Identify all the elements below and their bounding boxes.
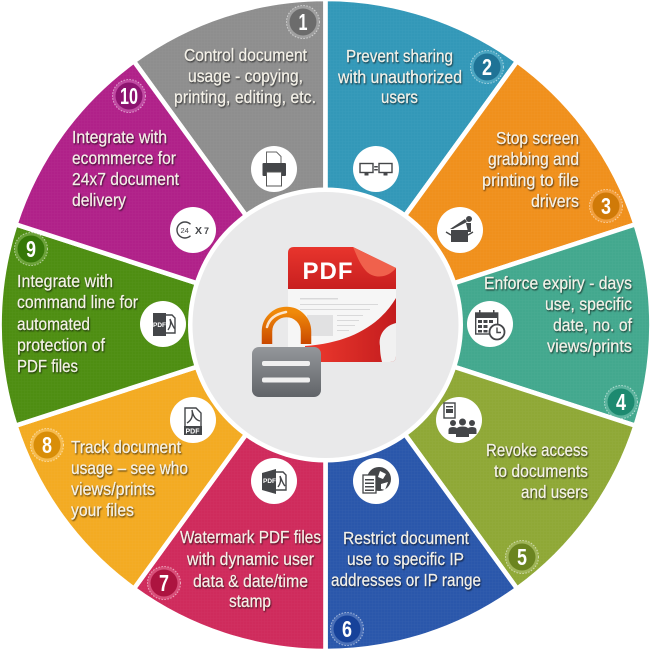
- text: panel 2: [337, 46, 462, 107]
- badge: number 7: [148, 566, 180, 600]
- panel: 8 track document usage: [16, 325, 326, 589]
- text: panel 9: automated: [17, 314, 90, 334]
- badge: number 9: 9: [26, 236, 36, 262]
- text: panel 5: and users: [521, 482, 588, 502]
- text: panel 3: grabbing and: [488, 149, 579, 169]
- icon: PDF watermark: [251, 458, 297, 504]
- text: panel 5: to documents: [494, 461, 588, 481]
- text: panel 7: with dynamic user: [186, 549, 314, 569]
- badge: number 6: 6: [342, 616, 352, 642]
- text: panel 9: protection of: [17, 335, 105, 355]
- text: panel 4: date, no. of: [553, 315, 632, 335]
- badge: number 4: 4: [616, 389, 626, 415]
- text: panel 7: Watermark PDF files: [180, 527, 321, 547]
- badge: number 3: 3: [601, 193, 611, 219]
- icon: 24 x 7: X: [195, 225, 202, 237]
- text: panel 10: ecommerce for: [72, 148, 176, 168]
- text: panel 1: printing, editing, etc.: [174, 87, 316, 107]
- text: panel 4: [484, 273, 632, 356]
- text: panel 10: Integrate with: [72, 127, 167, 147]
- badge: number 8: [30, 428, 64, 462]
- badge: number 2: [470, 50, 504, 84]
- badge: number 3: [590, 190, 622, 222]
- text: panel 5: [486, 440, 588, 502]
- text: panel 4: Enforce expiry - days: [484, 273, 632, 293]
- badge: number 10: [112, 80, 146, 112]
- text: panel 1: [174, 45, 316, 107]
- text: panel 8: views/prints: [71, 479, 155, 499]
- panel: 1 control document usage: [134, 0, 326, 325]
- panel: 7 watermark PDF files: [134, 325, 326, 651]
- text: panel 7: [180, 527, 321, 611]
- icon: two connected monitors: [353, 146, 399, 192]
- text: panel 8: your files: [71, 500, 134, 520]
- icon: PDF document: [170, 397, 216, 443]
- text: panel 9: Integrate with: [17, 271, 113, 291]
- icon: globe and document: [353, 458, 399, 504]
- icon: PDF document: PDF: [186, 428, 200, 436]
- icon: calendar and clock: [467, 301, 513, 347]
- badge: number 1: 1: [298, 9, 308, 35]
- text: panel 6: addresses or IP range: [331, 570, 481, 590]
- icon: screen grab box: [437, 207, 483, 253]
- text: panel 7: data & date/time: [193, 571, 308, 591]
- text: panel 3: printing to file: [482, 170, 579, 190]
- icon: 24 x 7: [170, 207, 216, 253]
- text: panel 2: Prevent sharing: [346, 46, 453, 66]
- icon: PDF conversion: [140, 301, 186, 347]
- center hub: [188, 188, 463, 462]
- icon: 24 x 7: 7: [204, 226, 209, 236]
- badge: number 7: 7: [159, 570, 169, 596]
- text: panel 8: [71, 437, 188, 520]
- panel: 4 enforce expiry: [326, 224, 650, 426]
- text: panel 7: stamp: [229, 591, 271, 611]
- icon: padlock: [252, 312, 321, 397]
- icon: 24 x 7: 24: [180, 226, 189, 235]
- text: panel 1: usage - copying,: [188, 66, 303, 86]
- badge: number 10: 10: [120, 83, 138, 109]
- icon: PDF document: [288, 247, 396, 362]
- text: panel 10: [72, 127, 179, 210]
- text: panel 4: use, specific: [545, 294, 632, 314]
- text: panel 3: drivers: [531, 191, 579, 211]
- badge: number 6: [330, 612, 364, 646]
- text: panel 3: [482, 128, 579, 211]
- text: panel 2: with unauthorized: [337, 67, 462, 87]
- text: panel 8: usage – see who: [71, 458, 188, 478]
- label: PDF: PDF: [302, 258, 354, 285]
- text: panel 9: command line for: [17, 292, 138, 312]
- text: panel 9: [17, 271, 138, 376]
- badge: number 4: [604, 386, 638, 418]
- text: panel 1: Control document: [184, 45, 307, 65]
- panel: 3 stop screen grabbing: [326, 61, 636, 325]
- panel: 5 revoke access: [326, 325, 636, 589]
- text: panel 6: use to specific IP: [347, 549, 464, 569]
- badge: number 8: 8: [42, 432, 52, 458]
- badge: number 1: [286, 6, 320, 38]
- badge: number 9: [14, 232, 48, 266]
- text: panel 4: views/prints: [547, 336, 632, 356]
- text: panel 5: Revoke access: [486, 440, 588, 460]
- text: panel 6: [331, 528, 481, 590]
- panel: 6 restrict document use: [326, 325, 517, 651]
- text: panel 9: PDF files: [17, 356, 78, 376]
- icon: printer: [251, 146, 297, 192]
- text: panel 8: Track document: [71, 437, 181, 457]
- text: panel 6: Restrict document: [343, 528, 469, 548]
- panel: 2 prevent sharing: [326, 0, 517, 325]
- text: panel 3: Stop screen: [496, 128, 579, 148]
- text: panel 10: delivery: [72, 190, 126, 210]
- badge: number 5: 5: [517, 544, 527, 570]
- text: panel 2: users: [381, 87, 418, 107]
- panel: 10 integrate with ecommerce: [16, 61, 326, 325]
- icon: document and users: [436, 397, 482, 443]
- icon: PDF conversion: PDF: [153, 322, 166, 329]
- badge: number 5: [506, 540, 538, 574]
- text: panel 10: 24x7 document: [72, 169, 179, 189]
- icon: PDF watermark: PDF: [263, 478, 276, 485]
- badge: number 2: 2: [482, 54, 492, 80]
- panel: 9 integrate with command line: [0, 224, 325, 426]
